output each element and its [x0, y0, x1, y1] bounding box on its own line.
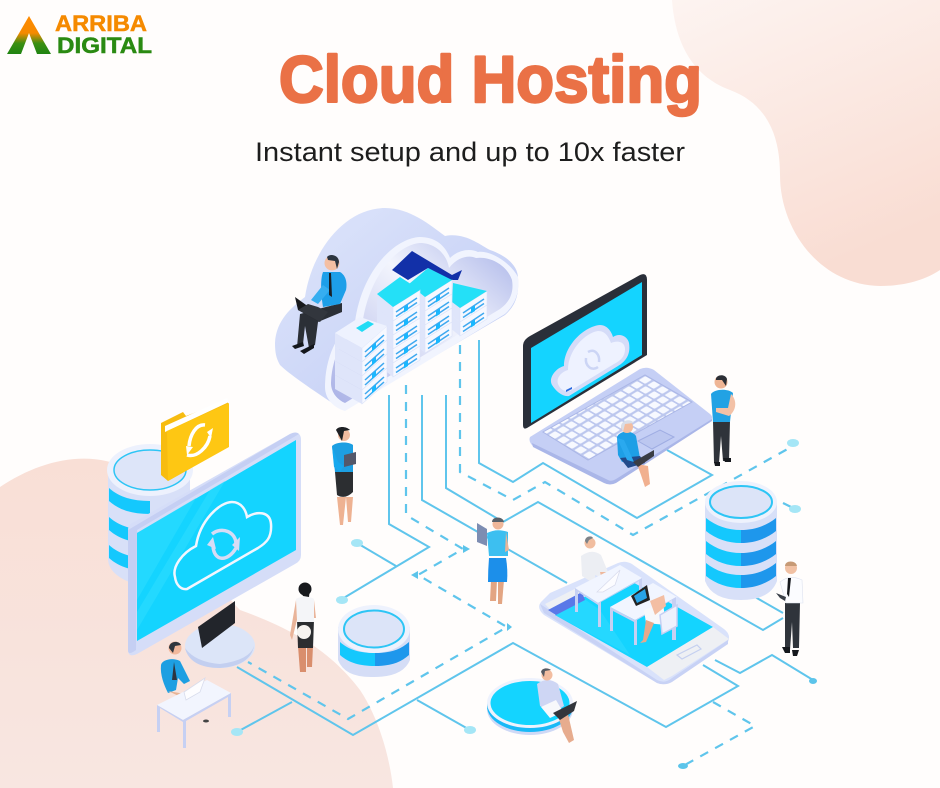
blob: top right [672, 0, 940, 286]
blue laptop [631, 585, 650, 606]
solid network lines [237, 340, 813, 735]
laptop base [530, 368, 712, 482]
subtitle: Instant setup and up to 10x faster [255, 137, 685, 167]
server stack column 3 [409, 268, 452, 353]
cloud interior [331, 243, 512, 403]
cloud front rim [325, 237, 518, 411]
laptop lid [523, 274, 647, 429]
phone body [539, 562, 729, 684]
logo text: ARRIBA [55, 11, 147, 36]
desk one [575, 565, 642, 603]
server stack column 4 [444, 283, 487, 336]
database: left [107, 444, 193, 588]
man with tablet, right [776, 562, 803, 656]
woman in blue dress [477, 518, 509, 604]
desk laptop [184, 678, 205, 700]
man in blue shirt [711, 375, 735, 466]
laptop touchpad [638, 430, 674, 449]
laptop screen cloud [551, 325, 629, 396]
seated woman [581, 552, 608, 585]
desk laptop [597, 570, 620, 592]
logo: DIGITAL [57, 33, 152, 58]
woman on laptop [617, 420, 654, 487]
man with laptop on cloud [292, 255, 346, 354]
woman on platform [537, 668, 577, 743]
database: right [705, 481, 777, 600]
dark blue rear block [392, 251, 462, 280]
server stack column 1 [335, 317, 387, 404]
monitor [128, 432, 301, 655]
laptop keyboard [543, 375, 692, 460]
laptop [523, 274, 712, 484]
logo [7, 11, 152, 58]
small database: centre [338, 605, 410, 677]
round platform [487, 678, 573, 735]
desk two [610, 583, 677, 620]
desk with man [157, 642, 231, 748]
server stack column 2 [377, 277, 420, 377]
monitor frame [128, 433, 301, 655]
network line end nodes [231, 439, 817, 769]
cloud with servers [275, 208, 518, 411]
phone screen [555, 575, 713, 667]
phone home button [677, 645, 701, 659]
monitor cloud icon [174, 502, 271, 589]
dashed network lines [248, 345, 795, 766]
logo mark [7, 16, 51, 54]
blob: bottom left [0, 459, 393, 788]
smartphone [539, 562, 729, 684]
desks and women on phone [575, 536, 677, 645]
cloud back body [275, 208, 518, 410]
woman with tablet [332, 427, 356, 525]
woman from behind [290, 582, 316, 672]
yellow folder [161, 398, 229, 481]
seated woman two [644, 603, 666, 625]
monitor stand [185, 601, 255, 668]
desk [157, 680, 231, 720]
title: Cloud Hosting [279, 42, 702, 116]
laptop screen [531, 282, 642, 423]
monitor screen [137, 440, 296, 641]
desk man [161, 659, 190, 693]
